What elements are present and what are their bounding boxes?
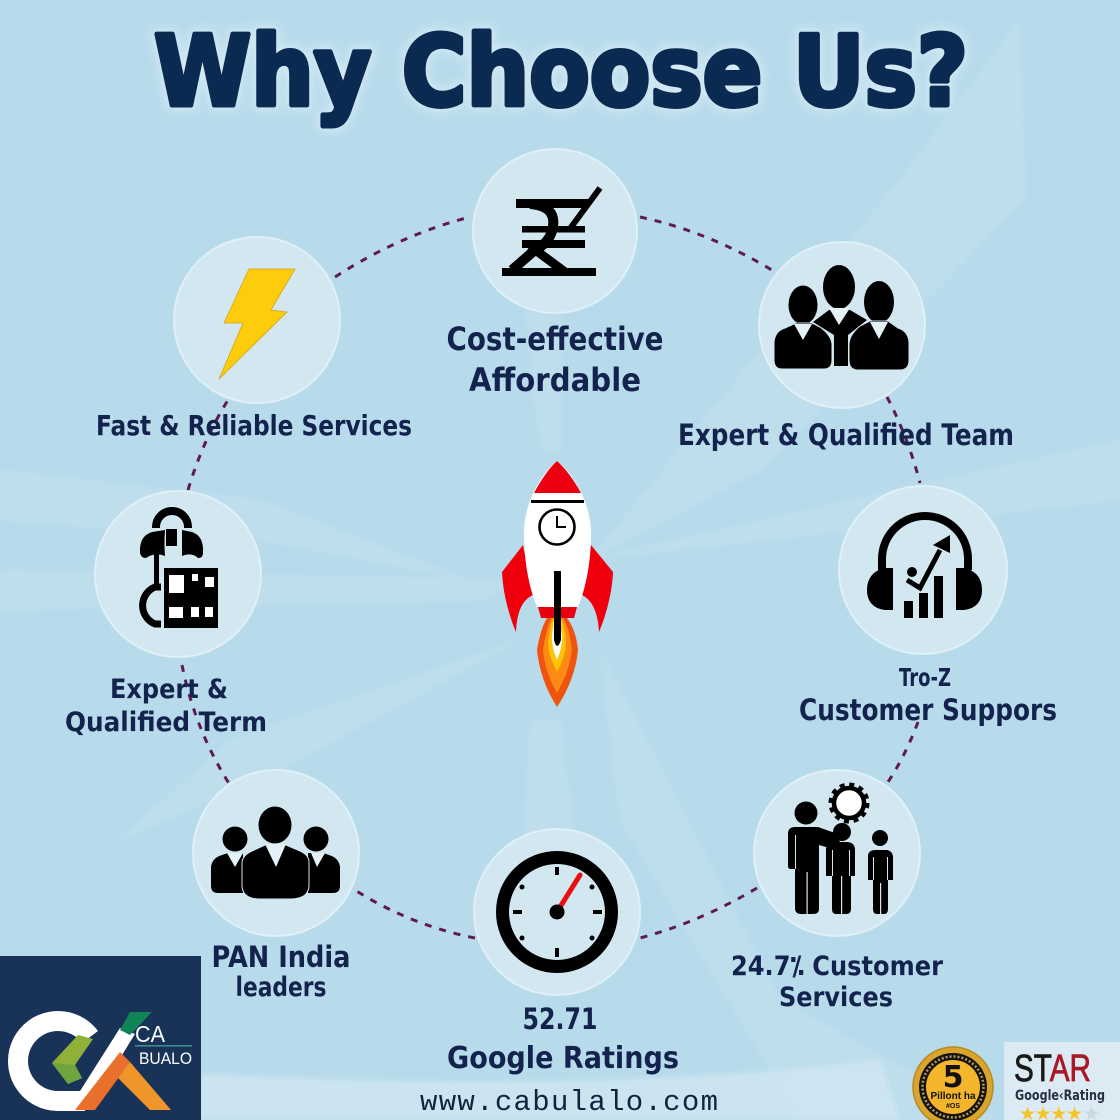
label: 24.7⁒ Customer (731, 951, 944, 982)
title: Why Choose Us? (154, 15, 968, 128)
label: Affordable (469, 361, 641, 399)
icon: headset with chart (867, 516, 982, 618)
website url: www.cabulalo.com (420, 1086, 718, 1119)
logo: CA Bualo panel: CA (135, 1021, 166, 1047)
badge: 5 star seal (913, 1047, 993, 1120)
dashed connecting ring (182, 217, 920, 938)
icon: rocket (502, 461, 613, 707)
panel: customer services (731, 770, 944, 1013)
label: leaders (236, 972, 326, 1003)
panel: phone and building (65, 491, 267, 738)
badge: star google rating (1004, 1042, 1120, 1120)
label (799, 663, 1057, 727)
label: Expert & Qualified Team (678, 418, 1014, 452)
label (731, 951, 944, 1013)
panel: customer support (799, 486, 1057, 727)
badge: 5 star seal: #OS (946, 1103, 960, 1110)
icon: speedometer gauge (502, 858, 612, 966)
label: Customer Suppors (799, 693, 1057, 727)
label: Google Ratings (447, 1041, 679, 1076)
icon: leader group (211, 806, 340, 899)
title: Why Choose Us? (154, 15, 968, 128)
label (446, 320, 664, 399)
label: PAN India (212, 940, 350, 974)
icon: gear (830, 784, 868, 822)
label (212, 940, 350, 1003)
icon: telephone with building (140, 511, 218, 628)
label: Fast & Reliable Services (96, 409, 412, 442)
label: Cost-effective (446, 320, 664, 358)
label (65, 674, 267, 738)
label (447, 1002, 679, 1076)
badge: 5 star seal: Pillont ha (930, 1091, 976, 1102)
icon: lightning bolt (219, 269, 295, 379)
label: Tro-Z (899, 663, 951, 692)
panel: google ratings (447, 829, 679, 1076)
label: Qualified Term (65, 707, 267, 738)
panel: cost-effective (446, 149, 664, 399)
icon: people with gear (788, 784, 893, 914)
panel: expert team (678, 242, 1014, 452)
label: Expert & (110, 674, 228, 705)
label: Services (779, 982, 893, 1013)
logo: CA Bualo panel (0, 956, 201, 1120)
icon: three people (774, 265, 909, 370)
label: 52.71 (522, 1002, 598, 1036)
panel: fast and reliable (96, 237, 412, 442)
badge: star google rating: STAR (1014, 1048, 1091, 1090)
badge: 5 star seal: 5 (943, 1060, 963, 1095)
icon: rupee with check (502, 188, 600, 276)
panel: PAN India leaders (193, 770, 359, 1003)
logo: CA Bualo panel: BUALO (139, 1049, 192, 1068)
